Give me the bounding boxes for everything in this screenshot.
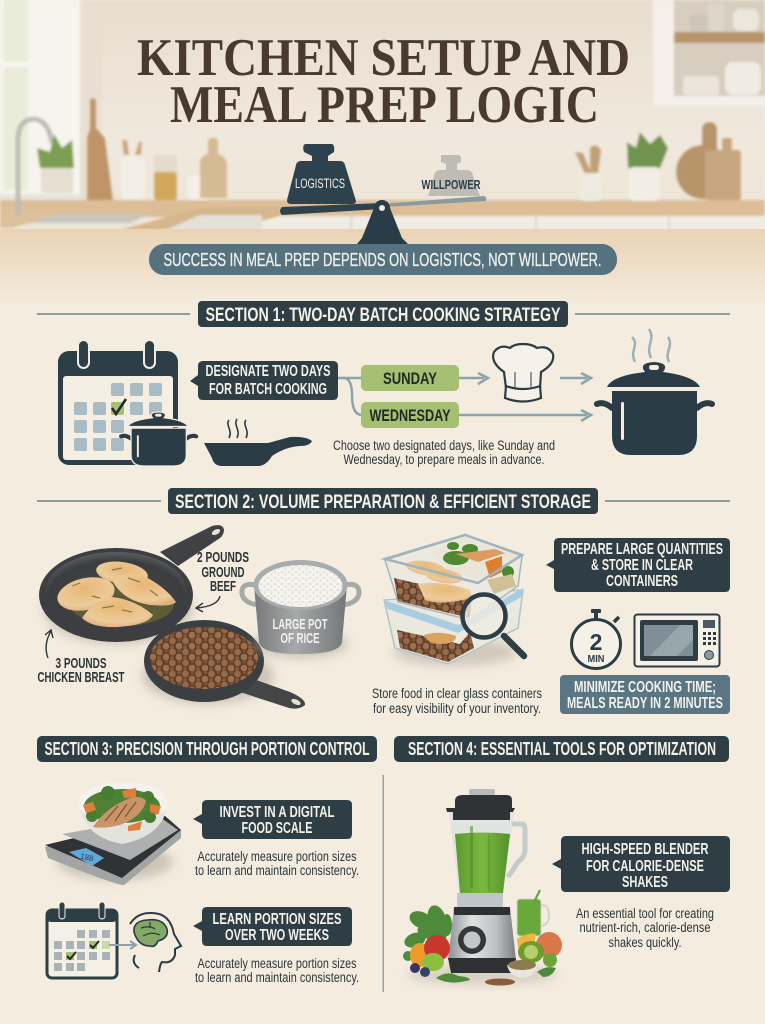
pill: wednesday: WEDNESDAY — [370, 406, 451, 425]
icon: microwave — [634, 614, 720, 666]
plant and pot, left — [37, 134, 74, 168]
callout: designate two days: DESIGNATE TWO DAYS — [206, 363, 331, 380]
arrow: calendar to brain — [109, 941, 136, 949]
banner: key message — [149, 244, 617, 275]
top container — [385, 535, 522, 620]
arrow: wednesday to pot — [459, 410, 591, 421]
description: section 1: Wednesday, to prepare meals in advance. — [344, 452, 544, 467]
callout: designate two days — [190, 361, 338, 400]
callout: prepare large quantities — [546, 538, 730, 592]
banner: key message: SUCCESS IN MEAL PREP DEPENDS ON LOGISTICS, NOT WILLPOWER. — [164, 250, 602, 270]
seed bowl — [507, 965, 537, 978]
label: large pot of rice: LARGE POT — [272, 616, 328, 633]
smoothie glass — [517, 899, 541, 936]
section 3 heading: SECTION 3: PRECISION THROUGH PORTION CONTROL — [44, 739, 370, 759]
weight: willpower — [422, 155, 481, 196]
callout: learn portion sizes: OVER TWO WEEKS — [225, 927, 329, 944]
counter back — [0, 200, 765, 217]
cutting board tall — [87, 98, 113, 200]
faucet — [18, 119, 52, 214]
image: digital food scale with bowl — [45, 782, 181, 885]
title: MEAL PREP LOGIC — [170, 76, 599, 134]
section 1 heading: SECTION 1: TWO-DAY BATCH COOKING STRATEGY — [206, 304, 560, 326]
description: portion sizes: to learn and maintain consistency. — [195, 970, 359, 985]
label: 2 pounds ground beef: 2 POUNDS — [197, 549, 249, 566]
bowl — [78, 782, 168, 844]
image: large pot of rice — [242, 560, 359, 658]
label: 2 pounds ground beef — [197, 549, 249, 595]
icon: 2 minute timer: 2 — [590, 629, 602, 655]
board — [200, 138, 227, 198]
description: section 1: Choose two designated days, like Sunday and — [333, 438, 555, 453]
description: section 2: Store food in clear glass containers — [372, 686, 542, 701]
section 4 heading — [394, 736, 729, 762]
callout: minimize cooking time — [560, 675, 730, 714]
icon: frying pan with steam — [204, 419, 312, 466]
shelf unit — [653, 0, 765, 106]
description: food scale: Accurately measure portion sizes — [198, 849, 357, 864]
callout: designate two days: FOR BATCH COOKING — [209, 381, 327, 398]
description: portion sizes — [195, 956, 359, 985]
callout: high-speed blender: HIGH-SPEED BLENDER — [582, 841, 709, 858]
image: blender with fruits and vegetables — [402, 789, 562, 986]
bottom container — [384, 588, 523, 664]
icon: calendar — [58, 340, 178, 465]
handle — [508, 824, 525, 877]
icon: small pot — [121, 412, 196, 466]
chicken pieces — [54, 572, 118, 616]
arrow: beef label to pan — [196, 596, 220, 612]
icon: head with brain — [130, 913, 181, 972]
description: portion sizes: Accurately measure portion sizes — [198, 956, 357, 971]
icon: 2 minute timer — [572, 609, 620, 668]
callout: prepare large quantities: CONTAINERS — [606, 573, 678, 590]
base — [448, 907, 516, 960]
fulcrum — [357, 200, 408, 244]
arrow: sunday to chef hat — [459, 373, 488, 384]
weight: logistics: LOGISTICS — [295, 176, 345, 191]
title: KITCHEN SETUP AND — [137, 29, 630, 87]
image: pan of ground beef — [142, 620, 305, 709]
pill: sunday — [361, 365, 459, 391]
window — [0, 0, 80, 196]
icon: 2 minute timer: MIN — [588, 653, 604, 665]
label: 3 pounds chicken breast: CHICKEN BREAST — [38, 669, 124, 686]
beam — [382, 196, 486, 207]
image: pan of chicken breasts — [39, 525, 224, 644]
label: 3 pounds chicken breast — [38, 655, 124, 686]
icon: balance scale, logistics outweighs willpower — [280, 144, 486, 244]
description: section 2 — [372, 686, 542, 716]
description: food scale — [195, 849, 359, 878]
callout: digital food scale: FOOD SCALE — [242, 820, 313, 837]
scale: 188 — [79, 852, 95, 863]
title — [137, 29, 630, 134]
icon: two-week calendar — [46, 902, 118, 978]
icon: large steaming pot — [597, 329, 712, 455]
callout: digital food scale — [193, 800, 352, 839]
jar — [154, 155, 177, 200]
weight: logistics — [287, 144, 356, 204]
right kitchen items — [575, 145, 601, 174]
callout: high-speed blender: FOR CALORIE-DENSE — [586, 858, 704, 875]
icon: chef hat — [493, 344, 553, 402]
section 3 heading — [37, 736, 377, 762]
weight: willpower: WILLPOWER — [422, 177, 481, 192]
description: section 1 — [333, 438, 555, 467]
canister — [187, 175, 210, 200]
magnifying glass — [462, 594, 524, 656]
divider between sections 3 and 4 — [382, 775, 384, 992]
description: food scale: to learn and maintain consistency. — [195, 863, 359, 878]
callout: prepare large quantities: & STORE IN CLEAR — [591, 557, 693, 574]
arrow: chef hat to pot — [560, 373, 591, 384]
callout: learn portion sizes: LEARN PORTION SIZES — [212, 911, 342, 928]
wooden counter foreground — [0, 229, 765, 305]
pill: wednesday — [361, 402, 459, 428]
callout: high-speed blender — [552, 836, 730, 892]
description: blender — [576, 906, 714, 950]
fruits — [410, 943, 430, 967]
image: clear glass containers with magnifier — [384, 535, 524, 666]
spinach leaves — [402, 903, 452, 961]
jar — [449, 811, 514, 893]
label: large pot of rice: OF RICE — [280, 630, 320, 647]
description: blender: An essential tool for creating — [576, 906, 714, 921]
callout: learn portion sizes — [193, 907, 352, 946]
arrow: chicken label to pan — [45, 630, 53, 658]
callout: high-speed blender: SHAKES — [622, 874, 668, 891]
label: large pot of rice — [272, 616, 328, 647]
pill: sunday: SUNDAY — [383, 369, 438, 388]
section 1 heading — [37, 301, 730, 327]
callout: digital food scale: INVEST IN A DIGITAL — [220, 804, 335, 821]
section 2 heading — [37, 488, 730, 514]
label: 2 pounds ground beef: BEEF — [210, 578, 236, 595]
connector from callout to day pills — [338, 378, 362, 415]
section 2 heading: SECTION 2: VOLUME PREPARATION & EFFICIENT STORAGE — [175, 491, 591, 513]
jug and utensils — [122, 140, 142, 155]
label: 2 pounds ground beef: GROUND — [202, 564, 245, 581]
kitchen photo header background — [0, 0, 765, 232]
description: blender: shakes quickly. — [608, 935, 682, 950]
label: 3 pounds chicken breast: 3 POUNDS — [56, 655, 106, 672]
description: blender: nutrient-rich, calorie-dense — [580, 920, 710, 935]
description: section 2: for easy visibility of your inventory. — [373, 701, 541, 716]
lid — [446, 795, 515, 820]
